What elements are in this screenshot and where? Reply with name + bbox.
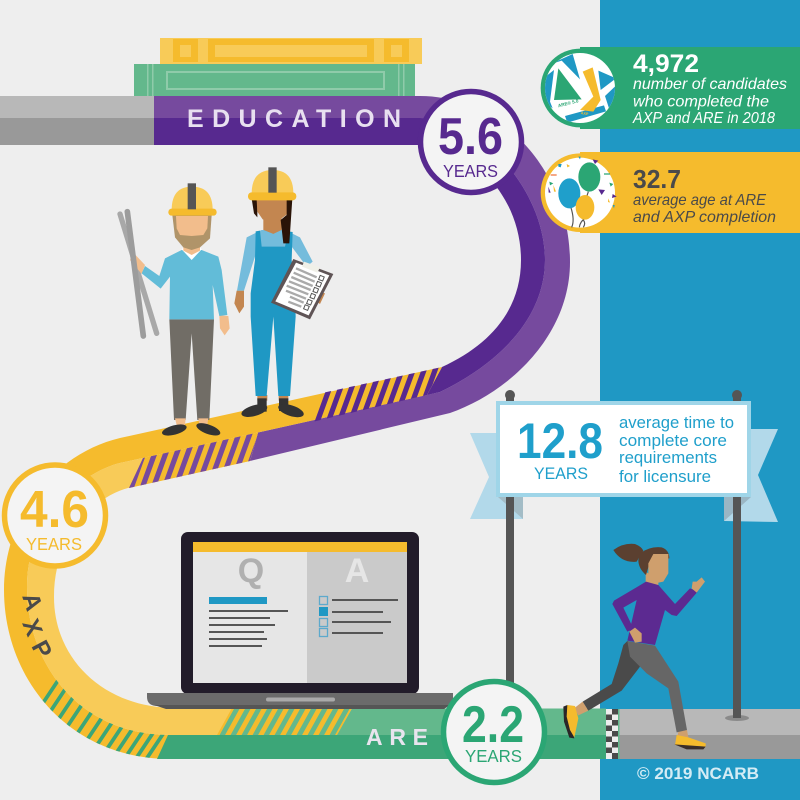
figure: man with pipes bbox=[120, 183, 230, 438]
stat circle: AXP 4.6 years bbox=[4, 465, 106, 566]
gray road end bbox=[620, 700, 800, 759]
sign: 12.8 years: 12.8 bbox=[517, 413, 603, 469]
stat circle: education 5.6 years: YEARS bbox=[443, 161, 498, 181]
icon: books bbox=[134, 38, 422, 96]
panel: average age stat bbox=[580, 152, 800, 233]
stat circle: education 5.6 years: 5.6 bbox=[438, 108, 503, 166]
stat circle: ARE 2.2 years bbox=[444, 682, 544, 782]
label: AXP: A bbox=[16, 590, 47, 614]
icon: laptop: Q bbox=[238, 552, 264, 590]
sign: 12.8 years: YEARS bbox=[534, 464, 588, 483]
panel: candidates stat: AXP and ARE in 2018 bbox=[632, 110, 775, 127]
icon: ARE and AXP badge: ARE® 5.0 bbox=[557, 97, 579, 108]
label: AXP bbox=[16, 590, 57, 663]
panel: candidates stat: number of candidates bbox=[633, 76, 787, 93]
stat circle: AXP 4.6 years: 4.6 bbox=[20, 481, 89, 539]
panel: candidates stat bbox=[580, 47, 800, 129]
icon: ARE and AXP badge bbox=[541, 49, 619, 127]
panel: candidates stat: who completed the bbox=[633, 94, 769, 110]
panel: average age stat: 32.7 bbox=[633, 164, 681, 194]
panel: average age stat: average age at ARE bbox=[633, 192, 766, 209]
road: ARE segment bbox=[157, 708, 606, 759]
sign: 12.8 years: average time to bbox=[619, 414, 734, 432]
label: EDUCATION: EDUCATION bbox=[187, 105, 401, 133]
copyright: © 2019 NCARB bbox=[637, 764, 759, 783]
label: ARE: ARE bbox=[366, 724, 428, 750]
road: AXP segment bbox=[4, 367, 442, 767]
stat circle: AXP 4.6 years: YEARS bbox=[26, 534, 82, 554]
figure: runner bbox=[563, 544, 706, 749]
stat circle: education 5.6 years bbox=[420, 92, 522, 192]
stat circle: ARE 2.2 years: YEARS bbox=[465, 746, 522, 766]
icon: laptop bbox=[147, 532, 453, 709]
icon: laptop: A bbox=[345, 552, 369, 590]
icon: balloons bbox=[541, 153, 619, 232]
sign: 12.8 years: complete core bbox=[619, 432, 727, 450]
road: education segment bbox=[0, 96, 570, 461]
label: AXP: X bbox=[16, 615, 47, 640]
panel: candidates stat: 4,972 bbox=[633, 50, 699, 78]
banner ribbon bbox=[470, 429, 778, 527]
sign: 12.8 years: requirements bbox=[619, 449, 717, 467]
stat circle: ARE 2.2 years: 2.2 bbox=[462, 696, 524, 754]
label: AXP: P bbox=[26, 636, 57, 663]
finish line bbox=[606, 709, 620, 759]
figure: woman with clipboard bbox=[234, 167, 333, 420]
sign: 12.8 years: for licensure bbox=[619, 468, 711, 486]
blue panel bbox=[600, 0, 800, 800]
sign poles bbox=[505, 390, 742, 717]
panel: average age stat: and AXP completion bbox=[633, 209, 776, 226]
sign: 12.8 years bbox=[498, 403, 749, 495]
icon: ARE and AXP badge: AXP bbox=[580, 111, 589, 116]
